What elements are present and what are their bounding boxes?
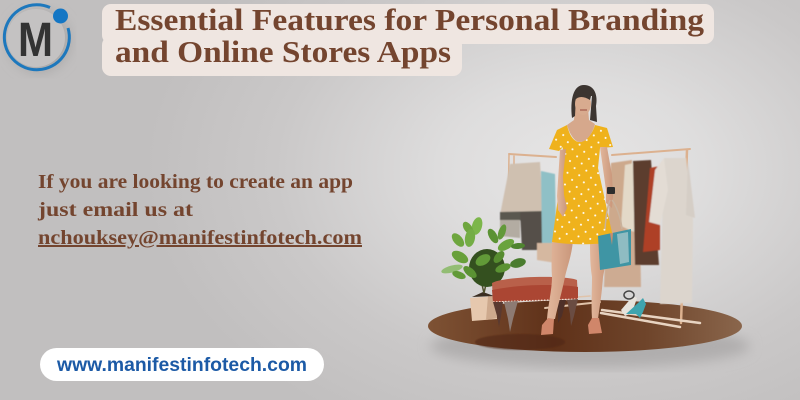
logo — [4, 5, 70, 72]
shoes on rack — [621, 291, 646, 318]
title: and Online Stores Apps — [115, 34, 451, 69]
dress — [549, 125, 614, 244]
contact text block: nchouksey@manifestinfotech.com — [38, 227, 362, 249]
right hanging clothes — [604, 158, 695, 304]
ottoman bench — [492, 277, 578, 332]
round wooden floor — [428, 300, 742, 352]
contact text block: If you are looking to create an app — [38, 171, 353, 193]
website pill — [40, 348, 324, 381]
title — [102, 2, 714, 76]
contact text block — [37, 171, 362, 249]
logo: M — [18, 14, 53, 67]
potted plant — [440, 216, 527, 321]
contact text block: just email us at — [37, 199, 193, 221]
arms, neck and head — [557, 85, 615, 217]
title: Essential Features for Personal Branding — [115, 2, 705, 37]
website pill: www.manifestinfotech.com — [56, 355, 307, 376]
legs and shoes — [541, 240, 607, 335]
floor shadow — [430, 324, 750, 368]
floor reflections — [475, 334, 565, 350]
illustration: woman in boutique — [428, 85, 750, 368]
left hanging clothes — [500, 162, 557, 263]
clothes rack — [508, 149, 700, 327]
teal shopping bag — [598, 200, 631, 270]
